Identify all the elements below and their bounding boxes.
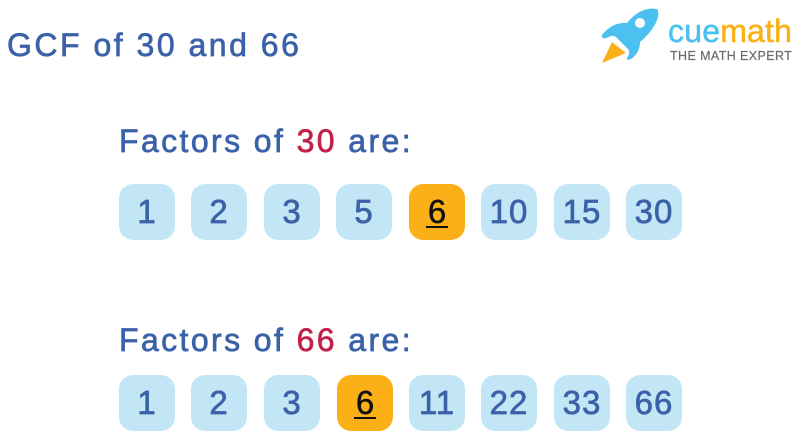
row: factors of 66: 3 [282,384,302,421]
row: factors of 30: 2 [209,193,229,230]
highlighted factor 6: 6 [356,384,374,421]
row: factors of 30: 15 [563,193,601,230]
highlighted factor 6 [337,375,393,431]
title: GCF of 30 and 66 [7,27,301,63]
heading: factors of 66: Factors of 66 are: [119,322,413,358]
row: factors of 30: 3 [282,193,302,230]
row: factors of 30 [119,184,682,240]
logo wordmark: cuemath [668,13,792,49]
highlighted factor 6: 6 [428,193,446,230]
row: factors of 66: 1 [137,384,157,421]
row: factors of 66: 66 [635,384,673,421]
icon: rocket [602,8,658,63]
row: factors of 66: 2 [209,384,229,421]
row: factors of 30: 5 [354,193,374,230]
row: factors of 30: 1 [137,193,157,230]
logo tagline: THE MATH EXPERT [670,49,792,63]
row: factors of 66: 11 [419,384,455,421]
row: factors of 66: 33 [563,384,601,421]
row: factors of 66 [119,375,682,431]
heading: factors of 30: Factors of 30 are: [119,123,413,159]
row: factors of 30: 10 [490,193,528,230]
row: factors of 66: 22 [490,384,528,421]
row: factors of 30: 30 [635,193,673,230]
highlighted factor 6 [409,184,465,240]
logo: cuemath [602,8,792,63]
